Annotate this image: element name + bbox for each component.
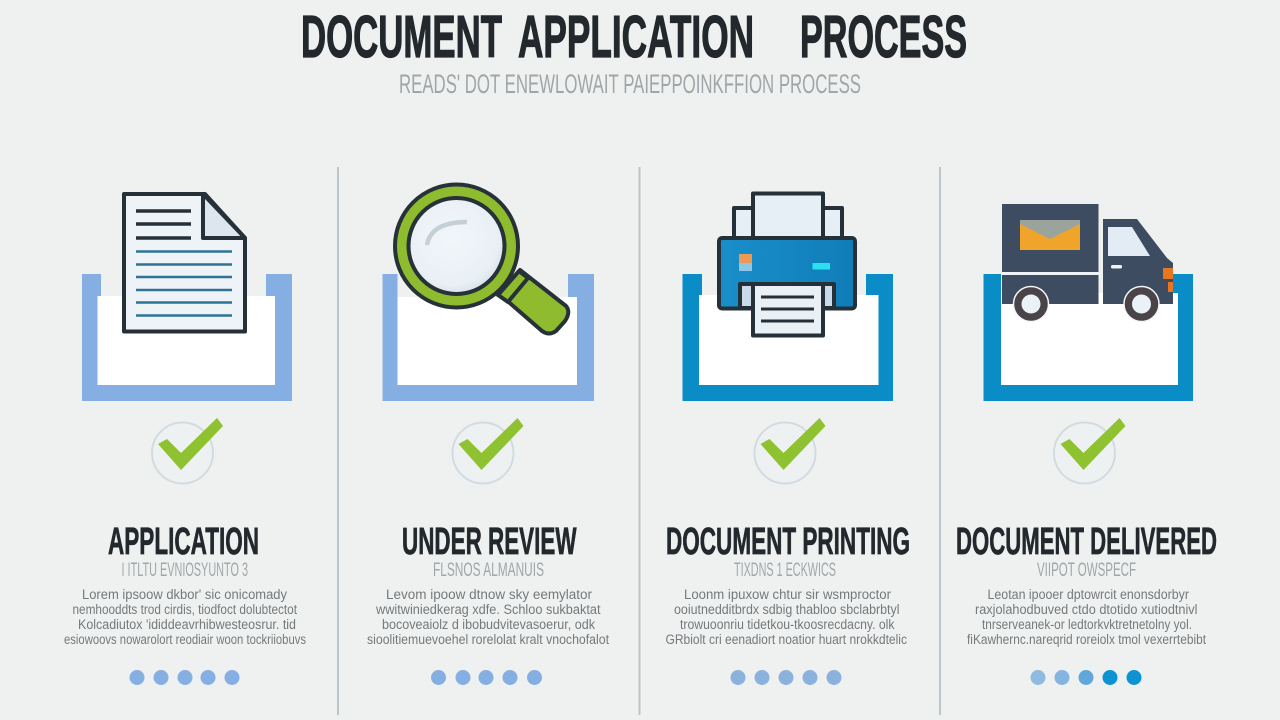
subtitle: READS' DOT ENEWLOWAIT PAIEPPOINKFFION PROCESS (399, 69, 861, 99)
body text: bocoveaiolz d ibobudvitevasoerur, odk (382, 617, 595, 632)
body text: esiowoovs nowarolort reodiair woon tockriiobuvs (64, 632, 306, 647)
panel: document printing (666, 194, 910, 685)
heading: UNDER REVIEW (402, 521, 577, 563)
body text: sioolitiemuevoehel rorelolat kralt vnochofalot (367, 632, 609, 647)
body text: raxjolahodbuved ctdo dtotido xutiodtnivl (975, 602, 1198, 617)
panel: application (64, 194, 306, 685)
progress dots (730, 670, 842, 685)
heading: DOCUMENT PRINTING (666, 521, 910, 563)
body text: nemhooddts trod cirdis, tiodfoct dolubtectot (72, 602, 297, 617)
tray (382, 274, 594, 401)
body text: Kolcadiutox 'ididdeavrhibwesteosrur. tid (78, 617, 296, 632)
sub-label: VIIPOT OWSPECF (1037, 560, 1136, 581)
body text: Loonm ipuxow chtur sir wsmproctor (684, 587, 891, 602)
heading: APPLICATION (108, 521, 259, 563)
title (301, 4, 967, 70)
body text: wwitwiniedkerag xdfe. Schloo sukbaktat (375, 602, 601, 617)
icon: checkmark (152, 418, 223, 484)
panel: document delivered (956, 204, 1217, 685)
icon: magnifier (395, 184, 568, 334)
body text (666, 587, 907, 647)
icon: document (124, 194, 245, 332)
body text (367, 587, 609, 647)
icon: printer (719, 194, 855, 336)
sub-label: FLSNOS ALMANUIS (433, 560, 544, 581)
panel: under review (367, 184, 609, 685)
body text (64, 587, 306, 647)
title: APPLICATION (518, 4, 754, 70)
body text: fiKawhernc.nareqrid roreiolx tmol vexerrtebibt (967, 632, 1206, 647)
body text: GRbiolt cri eenadiort noatior huart nrokkdtelic (666, 632, 907, 647)
title: DOCUMENT (301, 4, 502, 70)
tray (984, 274, 1193, 401)
progress dots (1030, 670, 1142, 685)
title: PROCESS (800, 4, 967, 70)
body text (967, 587, 1206, 647)
body text: trowuoonriu tidetkou-tkoosrecdacny. olk (680, 617, 895, 632)
body text: tnrserveanek-or ledtorkvktretnetolny yol. (982, 617, 1192, 632)
body text: ooiutnedditbrdx sdbig thabloo sbclabrbtyl (674, 602, 900, 617)
sub-label: I ITLTU EVNIOSYUNTO 3 (122, 560, 248, 581)
icon: delivery truck (1002, 204, 1173, 322)
icon: checkmark (1054, 418, 1126, 484)
progress dots (431, 670, 542, 685)
body text: Leotan ipooer dptowrcit enonsdorbyr (988, 587, 1189, 602)
tray (82, 274, 292, 401)
body text: Lorem ipsoow dkbor' sic onicomady (82, 587, 287, 602)
body text: Levom ipoow dtnow sky eemylator (386, 587, 593, 602)
icon: checkmark (754, 418, 826, 484)
icon: checkmark (452, 418, 524, 484)
sub-label: TIXDNS 1 ECKWICS (734, 560, 836, 581)
tray (682, 274, 893, 401)
progress dots (130, 670, 240, 685)
